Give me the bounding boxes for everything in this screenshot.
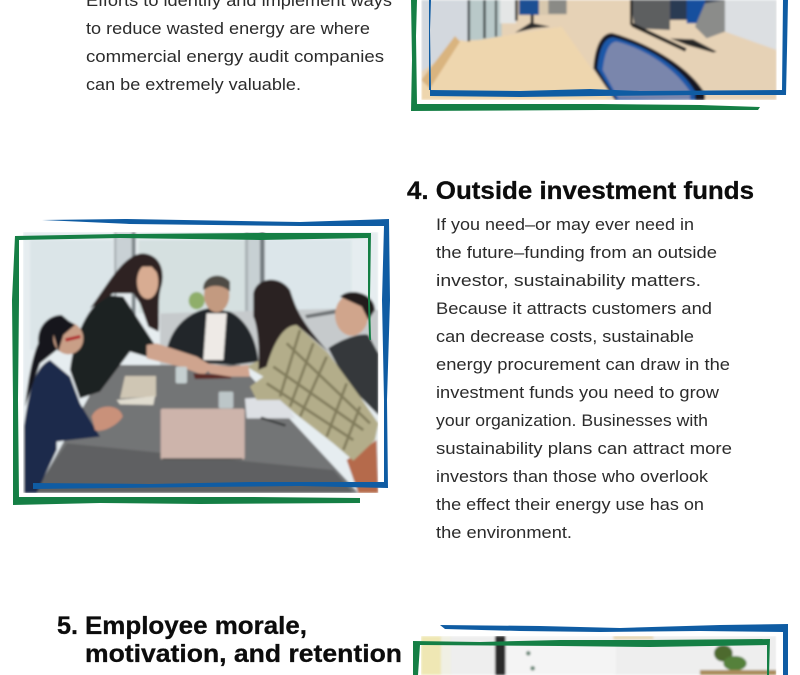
text block: outside investment funds body: the environment. xyxy=(436,523,572,542)
heading: 5. Employee morale, motivation, and retention: 5. xyxy=(57,612,78,640)
text block: outside investment funds body: energy procurement can draw in the xyxy=(436,355,730,374)
text block: outside investment funds body: investment funds you need to grow xyxy=(436,383,720,402)
text block: outside investment funds body: sustainability plans can attract more xyxy=(436,439,732,458)
photo: office with blue chair and wooden desk xyxy=(421,0,777,100)
text block: outside investment funds body: your organization. Businesses with xyxy=(436,411,708,430)
heading: 5. Employee morale, motivation, and retention xyxy=(57,612,402,668)
heading: 4. Outside investment funds: 4. Outside investment funds xyxy=(407,177,754,205)
heading: 5. Employee morale, motivation, and retention: Employee morale, xyxy=(85,612,307,640)
photo frame: green and blue brush strokes, top image xyxy=(411,0,788,111)
text block: energy audit intro: can be extremely valuable. xyxy=(86,75,301,94)
photo frame: green and blue brush strokes, meeting image xyxy=(12,219,390,505)
text block: outside investment funds body: the effect their energy use has on xyxy=(436,495,704,514)
text block: outside investment funds body: If you need–or may ever need in xyxy=(436,215,694,234)
heading: 5. Employee morale, motivation, and retention: motivation, and retention xyxy=(85,640,402,668)
photo frame: green and blue brush strokes, bottom image xyxy=(413,624,788,675)
text block: energy audit intro: commercial energy audit companies xyxy=(86,47,384,66)
photo: business team meeting around a table xyxy=(23,232,378,493)
text block: outside investment funds body: can decrease costs, sustainable xyxy=(436,327,694,346)
text block: energy audit intro xyxy=(86,0,392,94)
text block: outside investment funds body: Because it attracts customers and xyxy=(436,299,712,318)
text block: outside investment funds body: investor, sustainability matters. xyxy=(436,271,701,290)
text block: outside investment funds body: the future–funding from an outside xyxy=(436,243,717,262)
text block: outside investment funds body: investors than those who overlook xyxy=(436,467,709,486)
photo: bright office interior with plant xyxy=(421,636,776,675)
text block: energy audit intro: to reduce wasted energy are where xyxy=(86,19,370,38)
text block: outside investment funds body xyxy=(436,215,732,542)
